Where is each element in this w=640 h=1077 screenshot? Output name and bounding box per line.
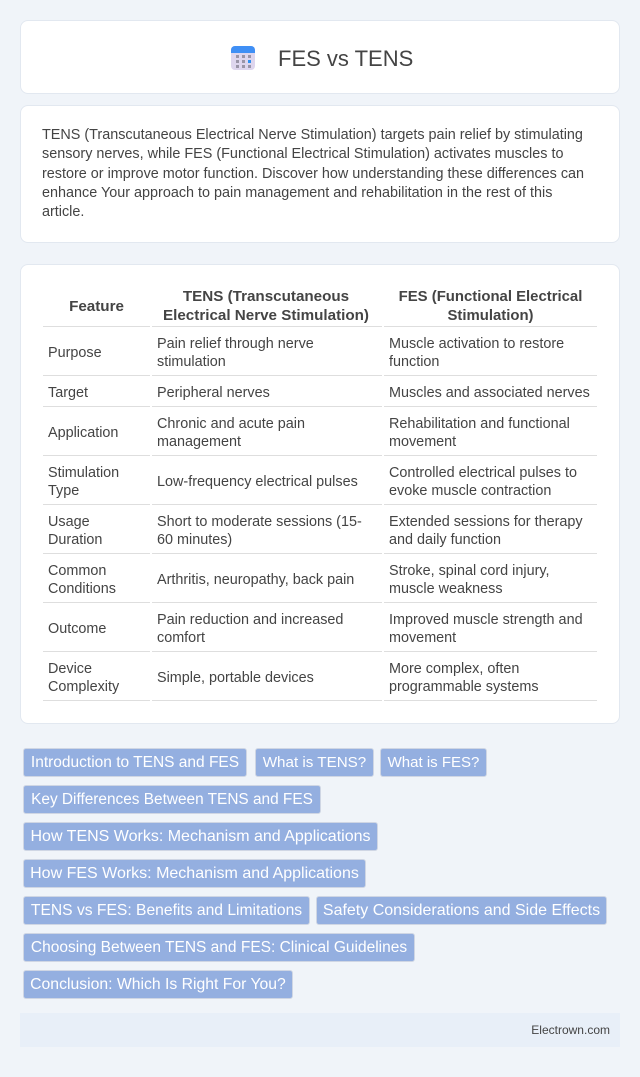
row: Outcome: Improved muscle strength and	[389, 612, 583, 628]
chip	[23, 822, 378, 851]
chip	[23, 933, 415, 962]
row: Purpose: function	[389, 354, 439, 370]
chip	[23, 859, 366, 888]
table header: Stimulation)	[447, 308, 534, 324]
chip	[23, 896, 310, 925]
row: Application: Application	[48, 425, 118, 441]
row: Outcome: comfort	[157, 630, 205, 646]
row: Target: Peripheral nerves	[157, 385, 270, 401]
row: Common Conditions: Arthritis, neuropathy, back pain	[157, 572, 354, 588]
row: Usage Duration: 60 minutes)	[157, 532, 232, 548]
chip	[316, 896, 607, 925]
icon: calendar	[231, 46, 255, 70]
intro text: enhance Your approach to pain management and rehabilitation in the rest of this	[42, 185, 552, 201]
chip	[23, 748, 247, 777]
chip	[255, 748, 374, 777]
row: Purpose: stimulation	[157, 354, 226, 370]
row: Application	[48, 416, 570, 450]
row: Purpose: Pain relief through nerve	[157, 336, 314, 352]
row: Application: Rehabilitation and functional	[389, 416, 570, 432]
row: Stimulation Type: Stimulation	[48, 465, 119, 481]
chip	[380, 748, 487, 777]
row: Common Conditions: Conditions	[48, 581, 116, 597]
intro text: restore or improve motor function. Discover how understanding these differences can	[42, 166, 584, 182]
chip: What is FES?	[388, 754, 479, 771]
row: Device Complexity: Device	[48, 661, 92, 677]
panel: comparison table	[20, 264, 620, 724]
row: Application: Chronic and acute pain	[157, 416, 305, 432]
row: Device Complexity	[48, 661, 539, 695]
chip	[23, 785, 321, 814]
row: Usage Duration: Extended sessions for therapy	[389, 514, 583, 530]
table header: Feature	[69, 298, 124, 315]
row: Outcome: Outcome	[48, 621, 106, 637]
table header: FES (Functional Electrical	[399, 289, 582, 305]
table header: TENS (Transcutaneous	[183, 288, 349, 305]
row: Usage Duration	[48, 514, 583, 548]
intro text: TENS (Transcutaneous Electrical Nerve Stimulation) targets pain relief by stimulating	[42, 127, 583, 143]
chip: Safety Considerations and Side Effects	[323, 902, 600, 919]
intro text: sensory nerves, while FES (Functional Electrical Stimulation) activates muscles to	[42, 146, 563, 162]
row: Common Conditions: Stroke, spinal cord injury,	[389, 563, 550, 579]
row: Common Conditions: muscle weakness	[389, 581, 503, 597]
chip: Key Differences Between TENS and FES	[31, 791, 313, 808]
row: Purpose: Purpose	[48, 345, 102, 361]
chip: Choosing Between TENS and FES: Clinical Guidelines	[31, 939, 407, 956]
row: Purpose	[48, 336, 564, 370]
chip: What is TENS?	[263, 754, 366, 771]
row: Outcome: movement	[389, 630, 456, 646]
row: Target: Target	[48, 385, 88, 401]
row: Device Complexity: programmable systems	[389, 679, 539, 695]
row: Common Conditions: Common	[48, 563, 106, 579]
chip: How TENS Works: Mechanism and Applications	[30, 828, 370, 845]
header card	[20, 20, 620, 94]
row: Application: movement	[389, 434, 456, 450]
row: Stimulation Type: evoke muscle contraction	[389, 483, 551, 499]
table header	[69, 288, 582, 324]
chip: Introduction to TENS and FES	[31, 754, 239, 771]
row: Stimulation Type: Controlled electrical pulses to	[389, 465, 577, 481]
row: Target	[48, 385, 590, 401]
row: Common Conditions	[48, 563, 550, 597]
row: Outcome: Pain reduction and increased	[157, 612, 343, 628]
row: Purpose: Muscle activation to restore	[389, 336, 564, 352]
row: Usage Duration: and daily function	[389, 532, 501, 548]
chip	[23, 970, 293, 999]
chip: Conclusion: Which Is Right For You?	[30, 976, 286, 993]
title: FES vs TENS	[278, 46, 413, 71]
row: Stimulation Type	[48, 465, 577, 499]
topic chips	[23, 748, 607, 999]
row: Device Complexity: Complexity	[48, 679, 119, 695]
chip: TENS vs FES: Benefits and Limitations	[31, 902, 302, 919]
footer credit: Electrown.com	[531, 1023, 610, 1037]
panel: introduction	[20, 105, 620, 243]
row: Device Complexity: More complex, often	[389, 661, 519, 677]
row: Application: management	[157, 434, 241, 450]
intro text	[42, 127, 584, 220]
row: Usage Duration: Usage	[48, 514, 90, 530]
row: Outcome	[48, 612, 583, 646]
row: Target: Muscles and associated nerves	[389, 385, 590, 401]
chip: How FES Works: Mechanism and Applications	[30, 865, 359, 882]
row: Stimulation Type: Low-frequency electrical pulses	[157, 474, 358, 490]
row: Usage Duration: Short to moderate sessions (15-	[157, 514, 362, 530]
row: Usage Duration: Duration	[48, 532, 102, 548]
row: Device Complexity: Simple, portable devices	[157, 670, 314, 686]
table header: Electrical Nerve Stimulation)	[163, 307, 369, 324]
intro text: article.	[42, 204, 84, 220]
footer	[20, 1013, 620, 1047]
row: Stimulation Type: Type	[48, 483, 79, 499]
